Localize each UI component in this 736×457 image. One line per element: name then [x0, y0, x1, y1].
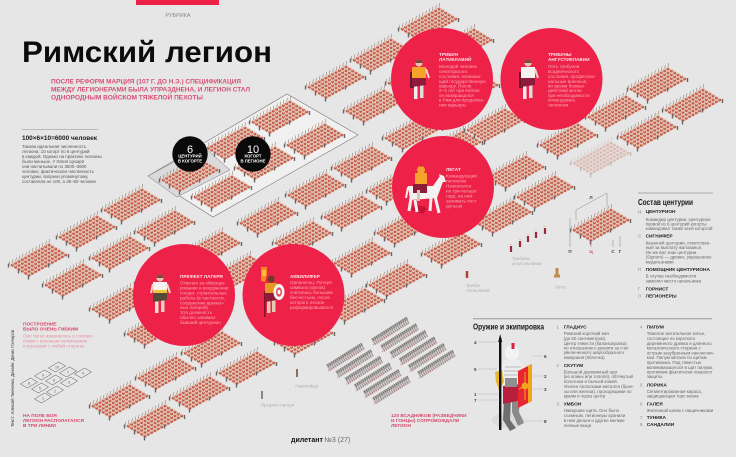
subtitle: ПОСЛЕ РЕФОРМ МАРЦИЯ (107 Г. ДО Н.Э.) СПЕЦИФИКАЦИЯ [51, 78, 241, 86]
panel: tribune angusticlavius: ТРИБУНЫ [548, 52, 572, 57]
legend column one: СКУТУМ [564, 363, 583, 369]
panel: tribune laticlavius: ния карьеры [439, 102, 466, 108]
small figure: legate [554, 268, 560, 276]
legend column two: 4 [640, 324, 643, 330]
battle line diagram: 10 [55, 366, 59, 370]
panel: camp prefect: работы (в частности, [180, 296, 225, 300]
panel: century composition: Л [638, 294, 641, 298]
label: aquilifer: Аквилифер [295, 384, 319, 388]
panel: century composition: заменял место начальника [646, 278, 702, 284]
cavalry note: ЛЕГИОН [391, 423, 411, 429]
callout numbers on soldier: 3 [544, 387, 547, 392]
legion size panel [22, 130, 102, 184]
panel: tribune laticlavius [391, 28, 493, 130]
panel: aquilifer: которого легион [290, 300, 325, 305]
battle line diagram: 1 [42, 396, 44, 400]
callout numbers on soldier [474, 340, 547, 424]
panel: century composition: С [638, 234, 641, 238]
panel: camp prefect: ных лагерей). [180, 304, 209, 310]
callout numbers on soldier: 5 [474, 367, 477, 372]
panel: tribune laticlavius: сословия, начинаю- [439, 74, 482, 79]
panel: legate [392, 136, 494, 238]
legend column one [556, 324, 634, 428]
panel: aquilifer: Орлоносец. Потеря [290, 280, 332, 285]
legion size description: легиона: 10 когорт по 6 центурий [22, 149, 90, 154]
label: legate: Легат [555, 284, 566, 290]
legend column one: полотном и бычьей кожей. [564, 379, 618, 384]
legend column two: защиты [647, 374, 662, 379]
legend column two: деревянного древка и длинного [647, 341, 712, 346]
century diagram: Л [589, 195, 593, 200]
legion size description: в каждой. Однако на практике легионы [22, 154, 102, 159]
century diagram: С [611, 249, 615, 254]
tribunes in line [511, 226, 545, 252]
badge: ten cohorts: КОГОРТ [244, 154, 262, 158]
panel: century composition: ный за выплату жалованья. [646, 245, 702, 250]
badge: ten cohorts: 10 [247, 144, 259, 156]
panel: legate: занимать пост [446, 198, 477, 204]
legion size description: они насчитывали по 3500–3600 [22, 164, 87, 169]
badge: six centuries: ЦЕНТУРИЙ [178, 154, 202, 158]
heading: weapons: Оружие и экипировка [473, 322, 544, 332]
legend column one: съемным, легионеры хранили [564, 413, 626, 418]
legend column two: противник фактически лишался [647, 370, 712, 374]
panel: tribune angusticlavius: при необходимости [548, 93, 590, 98]
note: flexible formation: Оно легко изменялось в соответ- [23, 334, 94, 338]
legend column one: 1 [556, 324, 560, 330]
legend column two: Железный шлем с нащечниками [647, 408, 714, 413]
badge: six centuries [172, 136, 208, 172]
legend column one: 2 [556, 363, 560, 368]
callout numbers on soldier: 1 [474, 392, 477, 397]
panel: tribune laticlavius: в Рим для продолжа- [439, 98, 485, 102]
battle line diagram: 7 [67, 370, 69, 374]
cavalry note: И ГОНЦЫ) СОПРОВОЖДАЛИ [391, 418, 460, 424]
panel: legate: ЛЕГАТ [446, 167, 461, 172]
panel: aquilifer: бесчестьем, после [290, 295, 330, 300]
legend column one: личные вещи [564, 423, 592, 428]
panel: legate: Командующий [446, 172, 477, 178]
legion size description: Такова идеальная численность [22, 144, 87, 149]
panel: century composition: (Signum) — древко, украшенное [646, 254, 712, 260]
panel: aquilifer: считалась большим [290, 290, 333, 295]
magazine footer: дилетант№3 (27) [291, 437, 350, 444]
panel: century composition: ГОРНИСТ [646, 286, 668, 292]
panel: century composition: Ц [638, 209, 642, 214]
note: three battle lines: ЛЕГИОН РАСПОЛАГАЛСЯ [23, 418, 85, 424]
panel: camp prefect: сооружение времен- [180, 300, 225, 306]
subtitle: ОДНОРОДНЫМ ВОЙСКОМ ТЯЖЕЛОЙ ПЕХОТЫ [51, 92, 203, 102]
panel: legate: года, на нем [446, 194, 472, 198]
callout numbers on soldier: 7 [474, 398, 477, 403]
legend column two [640, 324, 715, 428]
battle line diagram: 8 [28, 382, 30, 386]
panel: tribune angusticlavius: АНГУСТИКЛАВИИ [548, 57, 590, 62]
panel: tribune angusticlavius: всаднического [548, 69, 579, 74]
legion size description: человек; фактическая численность [22, 169, 95, 174]
legend column one: Центр тяжести (балансировка) [564, 341, 627, 346]
label: laticlavian tribune: Трибун [466, 283, 481, 288]
panel: tribune angusticlavius: во время боевых [548, 84, 585, 88]
panel: camp prefect [133, 244, 235, 346]
legion size formula: 100×6×10=6000 человек [22, 135, 98, 142]
panel: tribune angusticlavius [500, 28, 602, 130]
legend column one: увеличенного шарообразного [564, 350, 625, 355]
legend column two: 7 [640, 415, 643, 420]
panel: century composition [638, 193, 713, 300]
title: Римский легион [22, 36, 272, 69]
legend column one: краям и через центр [564, 394, 606, 398]
panel: legate: дольше [446, 204, 463, 208]
panel: century composition: первой из 6 центурий когорты [646, 222, 707, 226]
callout numbers on soldier: 4 [474, 340, 477, 345]
panel: century composition: Г [638, 286, 641, 292]
panel: century composition: Он же вас знак центурии [646, 250, 697, 255]
panel: tribune angusticlavius: сословия, профессио- [548, 74, 596, 79]
panel: camp prefect: обычно занимал [180, 315, 216, 320]
legend column two: 8 [640, 422, 643, 427]
legend column one: Римский короткий меч [564, 331, 609, 336]
small figure: aquilifer [296, 369, 298, 377]
legend column one: по отношению к рукояти за счет [564, 346, 629, 350]
panel: century composition: Командир центурии. Центурион [646, 217, 711, 222]
legend column one: ГЛАДИУС [564, 324, 587, 330]
panel: legate: легионом [446, 178, 466, 184]
note: flexible formation [23, 322, 94, 348]
badge: six centuries: 6 [187, 144, 193, 156]
icon: tribune laticlavius [410, 59, 429, 99]
badge: ten cohorts: В ЛЕГИОНЕ [240, 158, 266, 164]
legend column two: САНДАЛИИ [647, 422, 675, 428]
panel: camp prefect: Отвечал за обмунди- [180, 280, 226, 286]
legend column two: ГАЛЕЯ [647, 402, 663, 408]
label: angusticlavian tribunes: ангустиклавии [512, 261, 542, 266]
section label: РУБРИКА [165, 13, 191, 19]
panel: century composition: СИГНИФЕР [646, 234, 673, 240]
legion cohort frame [148, 94, 358, 217]
battle line diagram: 2 [54, 390, 56, 394]
badge: ten cohorts [235, 136, 271, 172]
legend column one: навершия (яблочка) [564, 355, 605, 360]
century diagram [568, 193, 631, 254]
panel: camp prefect: бывший центурион [180, 319, 221, 325]
icon: legionary soldier [492, 334, 532, 431]
panel: tribune laticlavius: Молодой человек [439, 63, 478, 69]
panel: century composition: В случае необходимости [646, 274, 697, 278]
legend column two: Сегментированная кираса, [647, 389, 702, 394]
battle line diagram: 4 [82, 372, 84, 376]
legend column one: (из осины или тополя), обтянутый [564, 374, 634, 379]
panel: weapons and equipment [473, 319, 715, 431]
panel: tribune laticlavius: щий государственную [439, 78, 486, 84]
section tab bar [136, 0, 219, 5]
icon: mounted legate [406, 163, 446, 214]
panel: camp prefect: ПРЕФЕКТ ЛАГЕРЯ [180, 274, 223, 279]
century diagram: Ц [589, 249, 593, 254]
label: prefect: Префект лагеря [261, 402, 295, 408]
legend column two: защищающая торс воина [647, 394, 699, 398]
callout numbers on soldier: 6 [544, 354, 547, 359]
cavalry [328, 318, 454, 404]
panel: camp prefect: Эта должность [180, 310, 213, 315]
legend column one: УМБОН [564, 402, 582, 408]
century diagram: Г [619, 249, 622, 254]
legend column two: ПИЛУМ [647, 324, 664, 330]
icon: tribune angusticlavius [519, 59, 538, 99]
legend column one: Большой деревянный щит [564, 370, 618, 374]
vertical credits: Текст: Алексей Тимченко, Дизайн: Денис Гончаров [9, 329, 15, 427]
legion size description: центурии, вопреки упомянутому, [22, 174, 88, 179]
panel: century composition: Казначей центурии, ответствен- [646, 240, 711, 246]
panel: tribune angusticlavius: Пять трибунов [548, 64, 580, 69]
panel: legate: Назначался [446, 184, 472, 188]
small figure: prefect [261, 391, 263, 399]
battle line diagram: 9 [42, 374, 44, 378]
legend column one: в нем деньги и другие мелкие [564, 418, 625, 423]
note: three battle lines: НА ПОЛЕ БОЯ [23, 413, 57, 419]
note: flexible formation: ствии с военным положением [23, 338, 87, 344]
battle line diagram: 5 [39, 386, 41, 390]
panel: aquilifer [242, 244, 344, 346]
battle line diagram: 6 [53, 378, 55, 382]
panel: century composition: медальонами [646, 260, 674, 264]
panel: tribune laticlavius: 2–3 лет при войске [439, 87, 480, 93]
panel: century composition: ПОМОЩНИК ЦЕНТУРИОНА [646, 267, 710, 273]
panel: tribune angusticlavius: нальные военные, [548, 79, 588, 84]
battle line diagram [20, 362, 92, 403]
small figure: laticlavian tribune [466, 271, 468, 278]
label: laticlavian tribune: латиклавий [466, 288, 490, 293]
panel: century composition: П [638, 267, 641, 272]
legion size description: были меньше. У Юлия Цезаря [22, 159, 85, 164]
callout numbers on soldier: 8 [544, 419, 547, 424]
label: angusticlavian tribunes: Трибуны [512, 256, 530, 261]
icon: aquilifer with standard and shield [261, 267, 284, 317]
note: three battle lines: В ТРИ ЛИНИИ [23, 423, 56, 429]
panel: aquilifer: реформировывался [290, 305, 333, 310]
panel: tribune laticlavius: ТРИБУН [439, 52, 459, 57]
callout numbers on soldier: 2 [544, 374, 547, 379]
panel: century composition: командовал также всей когортой [646, 226, 713, 231]
panel: tribune angusticlavius: действий могли [548, 87, 582, 93]
panel: tribune laticlavius: ЛАТИКЛАВИЙ [439, 55, 472, 62]
icon: camp prefect [151, 274, 170, 313]
legend column two: Тяжелое метательное копье, [647, 331, 705, 336]
cavalry note: 120 ВСАДНИКОВ (РАЗВЕДЧИКИ [391, 413, 467, 419]
note: flexible formation: и угрозами с любой стороны [23, 342, 84, 348]
panel: camp prefect: рование и вооружение [180, 286, 229, 290]
panel: tribune angusticlavius: командовать [548, 98, 576, 102]
panel: legate: на три-четыре [446, 188, 477, 194]
panel: aquilifer: АКВИЛИФЕР [290, 274, 320, 279]
legion size description: составляла не 100, а 35–60 человек [22, 179, 96, 184]
legend column two: острым зазубренным наконечни- [647, 350, 715, 356]
legend column two: противника. Под тяжестью [647, 360, 702, 365]
legend column two: ком. Пилум метали по щитам [647, 355, 707, 360]
panel: tribune laticlavius: карьеру. После [439, 84, 472, 88]
legend column one: Усилен полосками металла (брон- [564, 384, 634, 389]
panel: tribune laticlavius: сенаторского [439, 69, 467, 74]
legend column two: металлического стержня с [647, 346, 701, 350]
panel: tribune angusticlavius: легионом [548, 102, 568, 108]
legend column one: Навершие щита. Оно было [564, 408, 620, 413]
panel: tribune laticlavius: он возвращался [439, 93, 474, 98]
century diagram: П [568, 249, 572, 254]
legend column one: (до 60 сантиметров). [564, 336, 606, 341]
legend column two: 5 [640, 382, 643, 388]
note: flexible formation: ПОСТРОЕНИЕ [23, 322, 57, 328]
panel: camp prefect: солдат, строительные [180, 290, 227, 296]
badge: six centuries: В КОГОРТЕ [178, 158, 202, 164]
panel: century composition: ЛЕГИОНЕРЫ [646, 294, 677, 300]
legend column two: ТУНИКА [647, 415, 666, 421]
subtitle: МЕЖДУ ЛЕГИОНЕРАМИ БЫЛА УПРАЗДНЕНА, И ЛЕГИОН СТАЛ [51, 86, 250, 94]
panel: aquilifer: символа (орлов) [290, 285, 326, 290]
legend column two: ЛОРИКА [647, 382, 667, 388]
note: flexible formation: БЫЛО ОЧЕНЬ ГИБКИМ [23, 326, 78, 332]
legend column two: 6 [640, 402, 643, 406]
legend column two: вклинивающегося в щит пилума [647, 365, 713, 370]
panel: century composition: ЦЕНТУРИОН [646, 209, 676, 215]
heading: century composition: Состав центурии [638, 197, 693, 207]
legend column two: состоящее из короткого [647, 336, 696, 341]
battle line diagram: 3 [68, 380, 70, 384]
ghost century [570, 137, 631, 178]
legend column one: зы или железа), проходящими по [564, 389, 632, 394]
single cohort frame [148, 146, 230, 197]
legend column one: 3 [556, 402, 560, 406]
